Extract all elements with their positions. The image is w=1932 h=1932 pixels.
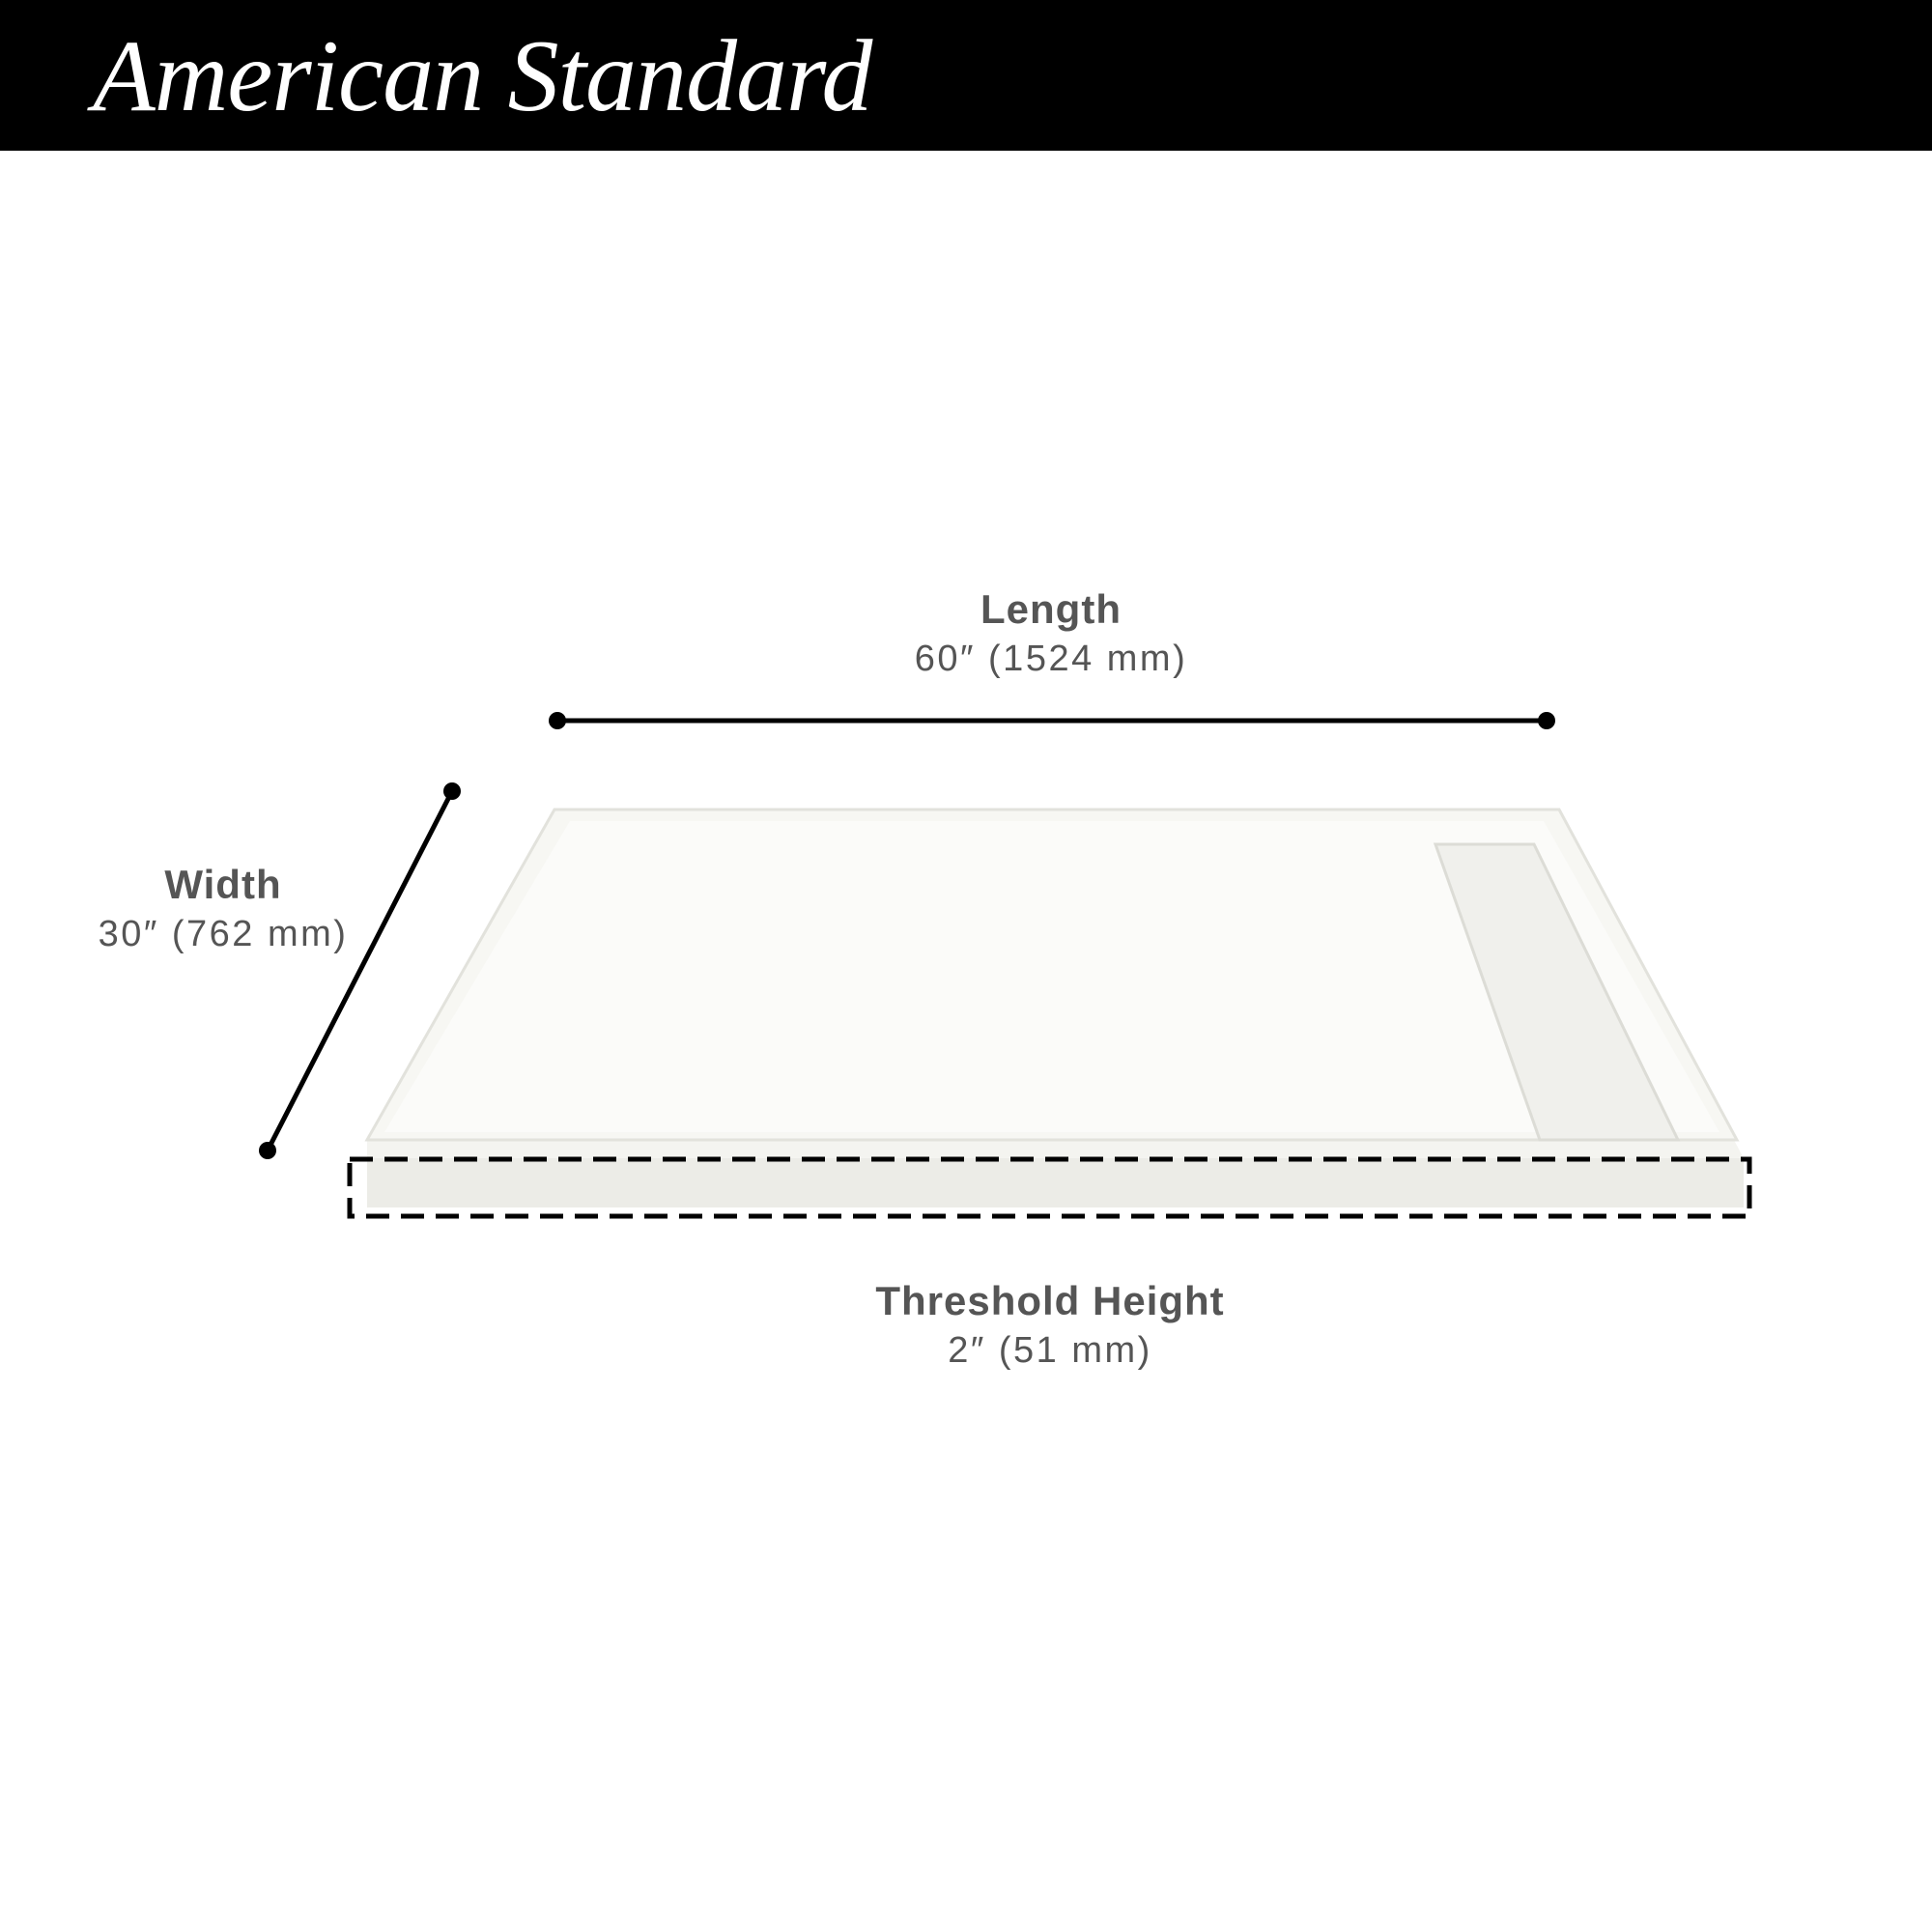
- label: length: 60″ (1524 mm): [915, 639, 1187, 679]
- label: threshold height: [875, 1278, 1225, 1371]
- label: threshold height: Threshold Height: [875, 1278, 1225, 1323]
- logo: American Standard: [93, 19, 871, 132]
- drain cover: [1435, 844, 1678, 1140]
- shower tray: [367, 810, 1744, 1208]
- label: width: [99, 862, 348, 954]
- label: length: [915, 586, 1187, 679]
- label: length: Length: [980, 586, 1122, 632]
- dimension: width: [259, 782, 461, 1159]
- dashed threshold box: [350, 1159, 1749, 1216]
- label: width: Width: [164, 862, 282, 907]
- dimension: length: [549, 712, 1555, 729]
- label: threshold height: 2″ (51 mm): [948, 1330, 1152, 1371]
- label: width: 30″ (762 mm): [99, 914, 348, 954]
- header bar: [0, 0, 1932, 151]
